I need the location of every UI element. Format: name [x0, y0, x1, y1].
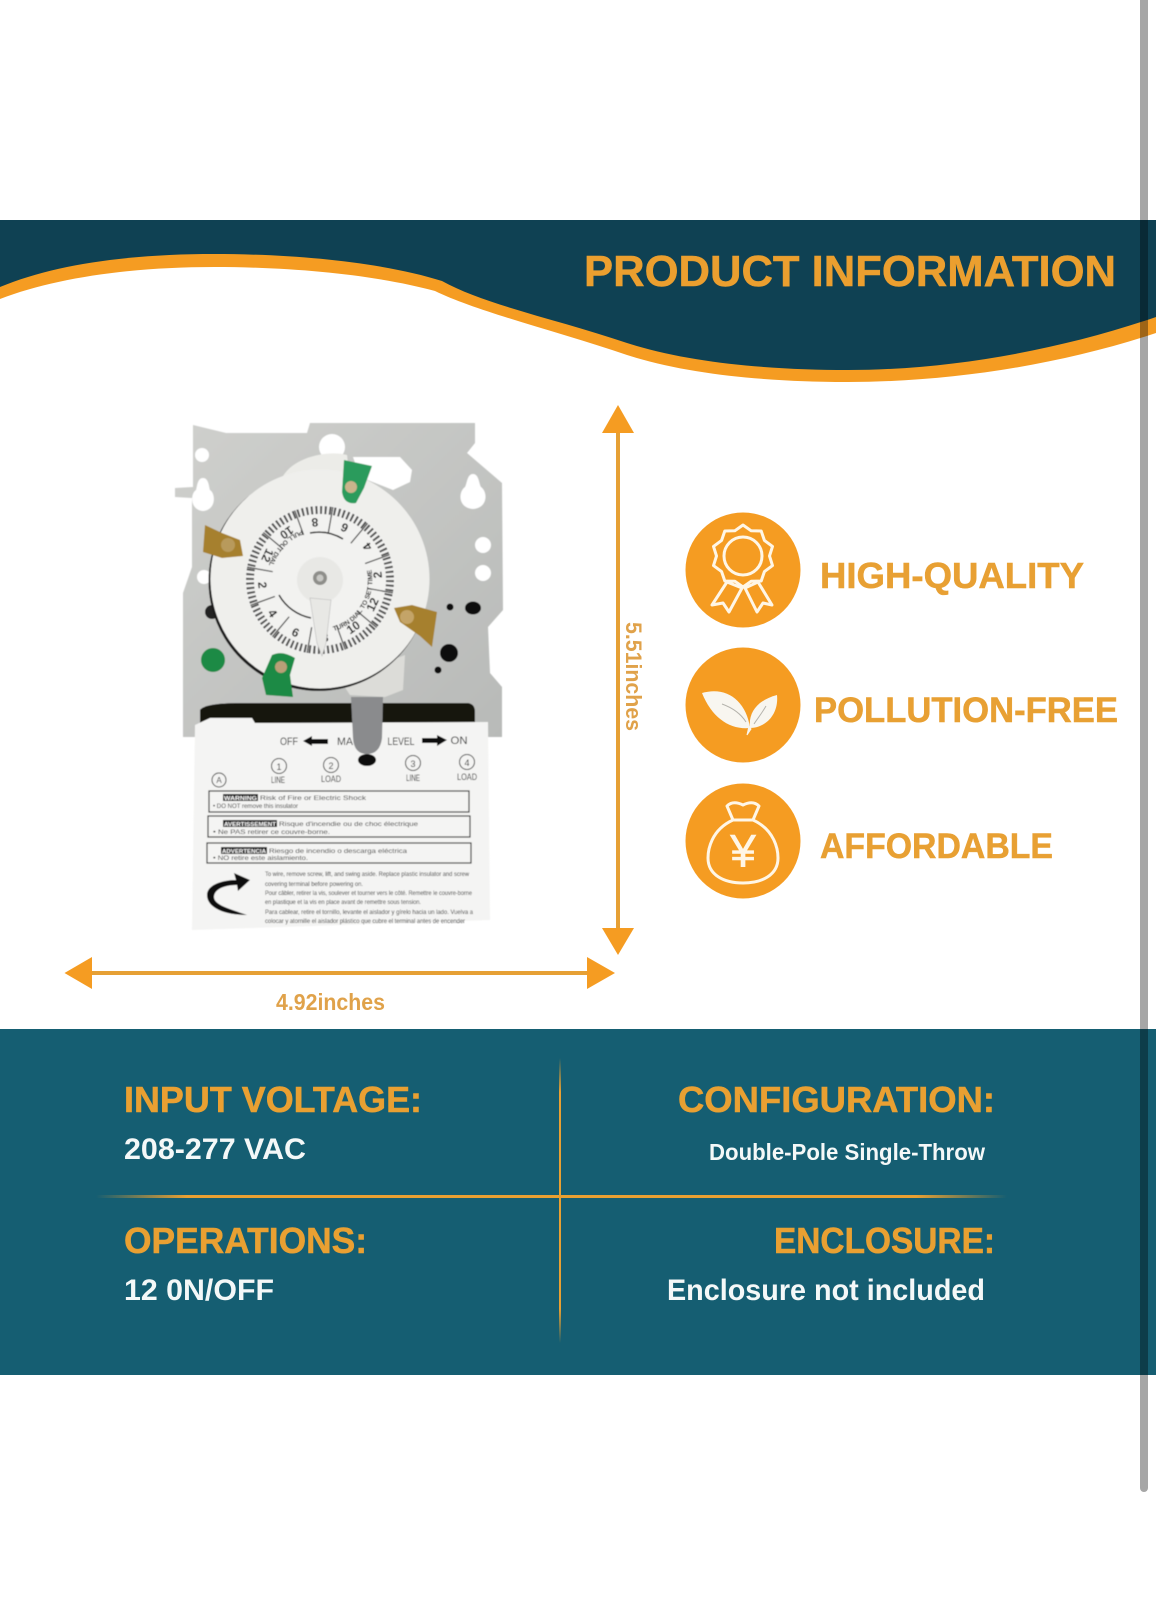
label: width value: 4.92inches [276, 989, 385, 1015]
timer dial: 8 [321, 630, 329, 645]
insulator card: LINE [271, 775, 285, 785]
insulator card: OFF [280, 736, 298, 748]
timer dial [208, 476, 430, 692]
icon: award rosette [686, 512, 800, 628]
metal mounting plate [175, 423, 503, 737]
insulator card: MA [337, 736, 354, 748]
timer dial: 8 [311, 515, 319, 530]
metal clip [351, 697, 383, 754]
insulator card: Para cablear, retire el tornillo, levante el aislador y gírelo hacia un lado. Vuelva a [265, 910, 474, 916]
timer dial: 4 [360, 540, 375, 553]
spec: operations: 12 0N/OFF [124, 1274, 274, 1307]
spec: operations [124, 1220, 367, 1307]
spec: enclosure: Enclosure not included [667, 1274, 985, 1307]
insulator card: LOAD [321, 774, 341, 784]
insulator card: Riesgo de incendio o descarga eléctrica [269, 849, 408, 855]
label: height value: 5.51inches [621, 622, 646, 731]
insulator card: 3 [410, 759, 416, 769]
timer dial: 6 [289, 625, 302, 640]
insulator card: colocar y atornille el aislador plástico que cubre el terminal antes de encender [265, 919, 465, 925]
spec: operations: OPERATIONS: [124, 1220, 367, 1261]
icon: money bag [686, 784, 800, 898]
spec: configuration: CONFIGURATION: [678, 1079, 995, 1120]
scrollbar overlay [1140, 0, 1148, 1492]
spec: configuration [678, 1079, 995, 1165]
feature: affordable [686, 784, 1053, 898]
panel: header banner [0, 220, 1156, 382]
timer dial: 10 [277, 523, 296, 542]
arrow: width dimension [64, 957, 615, 989]
spec: enclosure [667, 1220, 995, 1307]
label: pollution free: POLLUTION-FREE [814, 691, 1118, 730]
insulator card: WARNING [224, 796, 257, 802]
timer dial: 6 [338, 520, 351, 535]
arrow: height dimension [602, 405, 634, 955]
insulator card: ADVERTENCIA [222, 849, 266, 855]
insulator card: A [216, 776, 222, 785]
spec: enclosure: ENCLOSURE: [774, 1220, 995, 1261]
insulator card: LINE [406, 773, 420, 783]
timer dial: 2 [370, 571, 385, 579]
insulator card: • DO NOT remove this insulator [213, 804, 298, 810]
timer dial: 12 [363, 595, 382, 614]
insulator card: AVERTISSEMENT [224, 822, 277, 828]
insulator card: • Ne PAS retirer ce couvre-borne. [213, 830, 330, 836]
insulator card: covering terminal before powering on. [265, 882, 363, 888]
curved black arrow [207, 873, 250, 915]
spec: input voltage [124, 1079, 422, 1166]
green ground screw [201, 648, 225, 672]
timer dial: 12 [258, 546, 277, 565]
insulator card: 4 [464, 758, 470, 768]
heading: product information: PRODUCT INFORMATION [584, 247, 1116, 296]
feature: pollution free [686, 648, 1118, 762]
insulator card [192, 718, 490, 930]
insulator card: • NO retire este aislamiento. [213, 856, 308, 862]
icon: leaves [686, 648, 800, 762]
panel: specifications [0, 1029, 1156, 1375]
timer dial: 4 [265, 607, 280, 620]
spec: configuration: Double-Pole Single-Throw [709, 1139, 985, 1165]
insulator card: Pour câbler, retirer la vis, soulever et tourner vers le côté. Remettre le couvre-borne [265, 891, 473, 897]
label: affordable: AFFORDABLE [820, 827, 1053, 866]
insulator card: Risque d'incendie ou de choc électrique [279, 822, 419, 828]
spec: input voltage: INPUT VOLTAGE: [124, 1079, 422, 1120]
label: high quality: HIGH-QUALITY [820, 555, 1084, 596]
timer dial: TURN DIAL TO SET TIME [332, 570, 373, 631]
timer dial: 10 [344, 618, 363, 637]
insulator card: To wire, remove screw, lift, and swing aside. Replace plastic insulator and screw [265, 872, 470, 878]
terminal screws [203, 460, 437, 697]
product photo: timer mechanism [174, 422, 504, 930]
feature: high quality [686, 512, 1084, 628]
insulator card: Risk of Fire or Electric Shock [260, 796, 367, 802]
icon: money bag: ¥ [729, 825, 756, 877]
timer dial: PULL OUT DIAL [268, 530, 304, 566]
insulator card: LEVEL [388, 736, 414, 748]
insulator card: LOAD [457, 772, 477, 782]
insulator card: en plastique et la vis en place avant de remettre sous tension. [265, 900, 421, 906]
timer dial: 2 [255, 581, 270, 589]
insulator card: 2 [328, 761, 334, 771]
spec: input voltage: 208-277 VAC [124, 1133, 306, 1166]
insulator card: ON [450, 735, 468, 747]
insulator card: 1 [276, 762, 282, 772]
